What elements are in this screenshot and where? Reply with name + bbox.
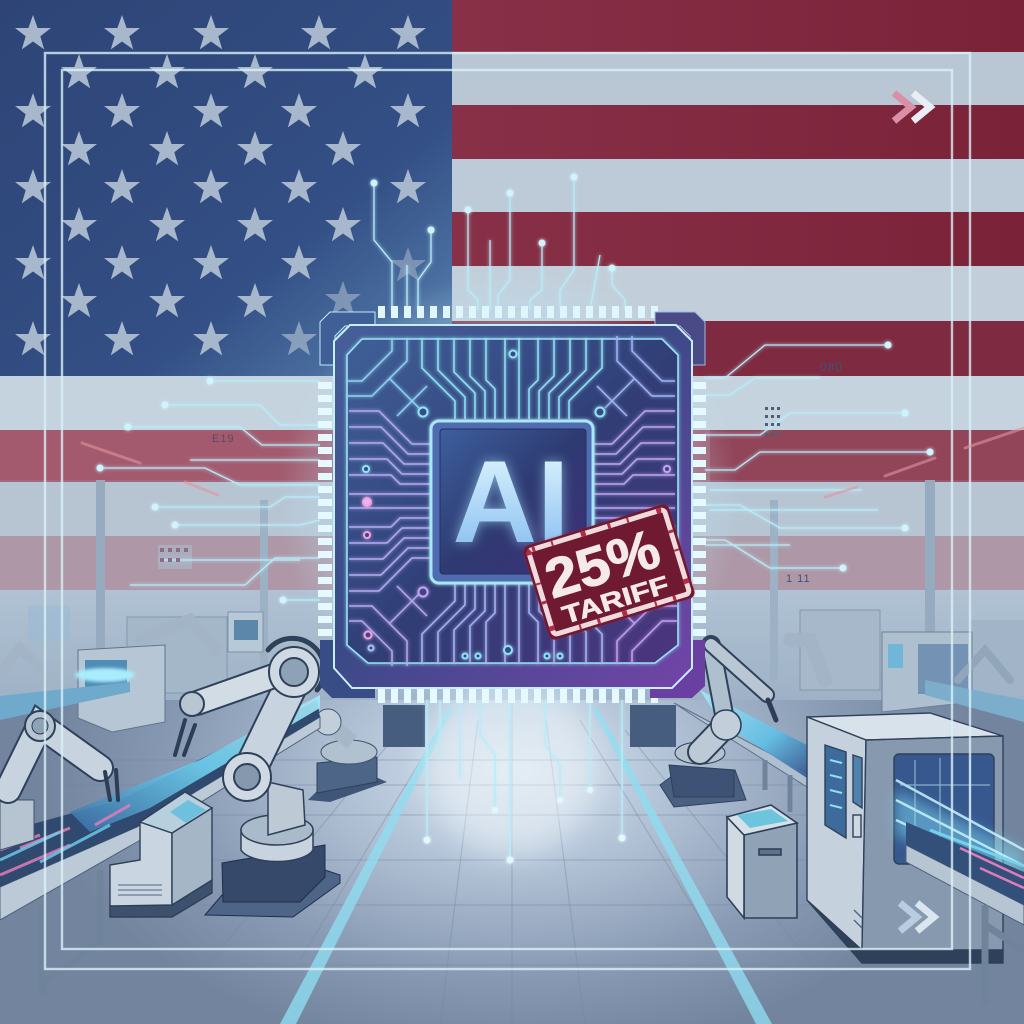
data label 080: 080 <box>820 360 843 374</box>
conveyor legs <box>42 870 100 995</box>
circuit nodes <box>363 350 670 658</box>
floor glow under chip <box>427 675 597 855</box>
data dots left <box>160 548 188 562</box>
chip inner board <box>347 339 678 663</box>
bottom chevrons <box>900 903 934 931</box>
left robot arm <box>0 711 118 850</box>
stamp body <box>522 503 696 641</box>
chip corner brackets <box>320 312 705 698</box>
right pins <box>692 382 706 636</box>
stamp TARIFF: TARIFF <box>559 571 672 630</box>
kiosk left <box>110 792 212 917</box>
machine screen small <box>853 755 862 808</box>
chip <box>318 306 706 703</box>
left pins <box>318 382 332 636</box>
flag canton <box>0 0 452 376</box>
background robot right <box>958 650 1010 680</box>
flag stars <box>15 15 426 355</box>
top pins <box>378 306 658 318</box>
front right conveyor <box>906 822 1024 1005</box>
flag <box>0 0 1024 590</box>
factory back wall detail <box>0 480 1024 710</box>
data label E19: E19 <box>212 433 235 445</box>
background robot left <box>2 648 50 678</box>
stamp 25%: 25% <box>538 517 667 610</box>
small robot behind center <box>383 705 425 747</box>
stamp border <box>528 509 690 635</box>
left traces <box>96 378 320 604</box>
machine side screen <box>825 745 846 838</box>
AI glow: AI <box>452 436 570 567</box>
right conveyor <box>674 690 807 812</box>
machine light beams <box>895 758 1024 890</box>
AI core die <box>440 429 586 574</box>
kiosk right <box>727 805 797 918</box>
main robot arm <box>175 638 340 917</box>
background robot far right <box>790 640 825 680</box>
circuit traces <box>347 336 677 666</box>
right traces <box>705 342 934 572</box>
main machine right <box>807 713 1003 963</box>
background robot far <box>140 620 215 650</box>
background conveyor left <box>0 682 130 720</box>
left conveyor <box>0 695 320 995</box>
pink light streaks <box>82 428 1024 497</box>
chip plate <box>334 325 692 688</box>
right conveyor back legs <box>765 760 790 812</box>
stamp border wear <box>528 509 690 635</box>
top chevrons <box>894 93 930 121</box>
bottom pins <box>378 688 658 703</box>
data label 1 11: 1 11 <box>786 573 811 585</box>
AI text: AI <box>452 436 570 567</box>
external traces <box>96 174 934 864</box>
small robot behind left <box>308 709 387 802</box>
small robot behind center right <box>630 705 676 747</box>
background machine right <box>882 632 972 712</box>
background conveyor right <box>925 680 1024 722</box>
floor <box>0 700 1024 1024</box>
chip halo <box>280 270 740 730</box>
AI core frame <box>431 421 593 583</box>
data dots right <box>765 407 780 436</box>
background machine left <box>75 645 165 732</box>
top traces <box>370 174 625 310</box>
back wall <box>0 375 1024 720</box>
front conveyor leg <box>985 905 1024 1005</box>
floor light strips <box>280 708 772 1024</box>
machine window <box>894 754 994 864</box>
tariff stamp <box>522 503 696 641</box>
flag stripes <box>0 0 1024 590</box>
bottom traces <box>424 700 626 864</box>
stamp shadow glow <box>522 503 696 641</box>
floor tiles <box>0 700 1024 1024</box>
right robot arm <box>660 645 776 807</box>
